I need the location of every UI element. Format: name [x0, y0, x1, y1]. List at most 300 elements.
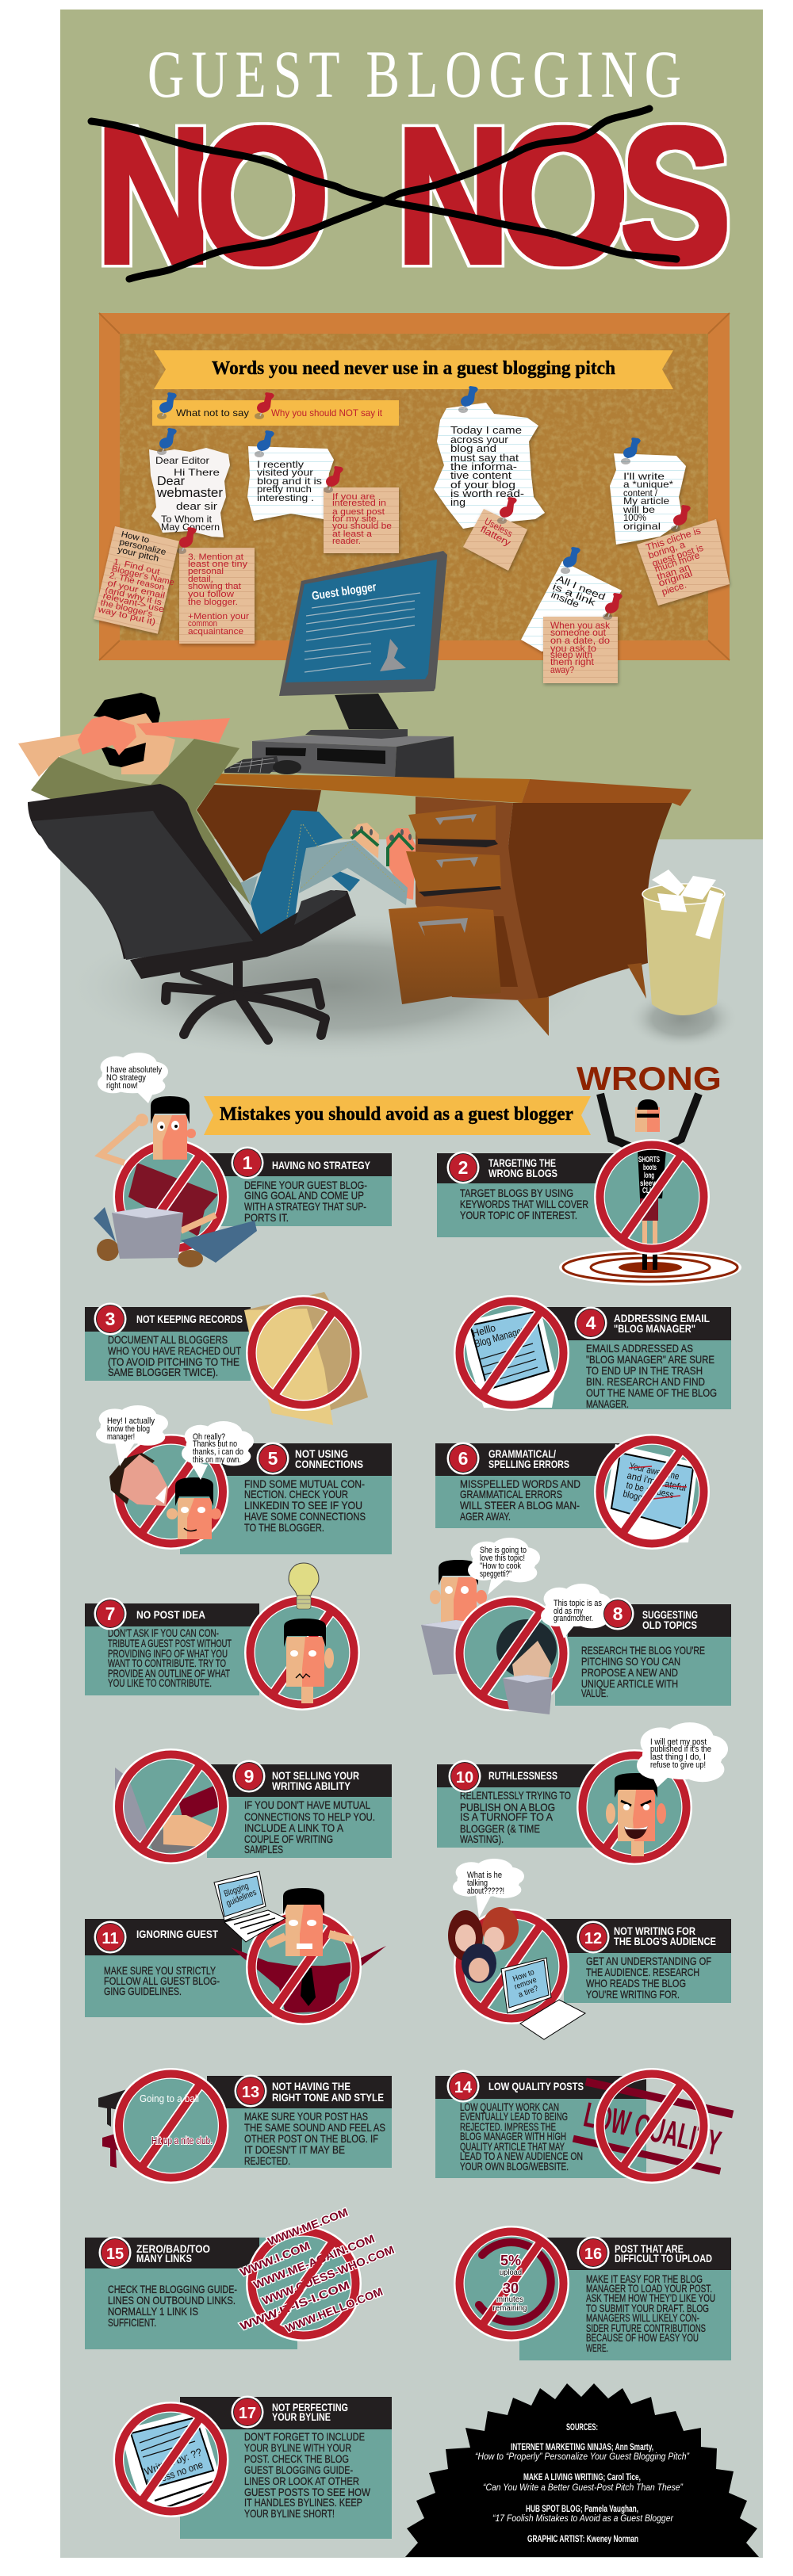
grinning head: [606, 1773, 666, 1856]
note: I recently visited: pretty much: [257, 483, 312, 495]
speech bubble woman: This topic is as: [554, 1599, 602, 1608]
note: mention personal detail: you follow: [188, 590, 234, 599]
note: how to personalize: 2. The reason: [109, 571, 165, 593]
note: salutations: webmaster: [156, 485, 223, 500]
title: OLD TOPICS: [642, 1619, 697, 1631]
description: MANAGER TO LOAD YOUR POST.: [586, 2282, 712, 2295]
cork surface: [120, 334, 708, 640]
description: GING GUIDELINES.: [104, 1985, 182, 1997]
description: GET AN UNDERSTANDING OF: [586, 1955, 711, 1967]
number badge: [257, 1443, 289, 1474]
links: WWW.I.COM: [238, 2239, 312, 2279]
laptop with byline: [121, 2410, 219, 2509]
description: OUT THE NAME OF THE BLOG: [586, 1386, 717, 1399]
title: ZERO/BAD/TOO: [136, 2242, 210, 2255]
description: [460, 1789, 571, 1845]
panel: [207, 1153, 392, 1226]
note: useless flattery: Useless: [483, 515, 515, 539]
arms: [268, 1934, 353, 1944]
description: LINKEDIN TO SEE IF YOU: [244, 1499, 362, 1512]
shirt words: boots: [643, 1164, 657, 1172]
description: WERE.: [586, 2341, 608, 2354]
laptop with errors: and i'm grateful: [626, 1470, 688, 1493]
board frame: [99, 313, 730, 660]
title: RUTHLESSNESS: [488, 1769, 557, 1782]
description: TRIBUTE A GUEST POST WITHOUT: [108, 1637, 232, 1649]
note: if you are interested: at least a: [332, 529, 373, 539]
chair seat: [130, 890, 356, 979]
letters: N: [96, 87, 212, 304]
links: WWW.ME.COM: [266, 2206, 350, 2248]
mistake 12: not writing for the blog's audience: [448, 1859, 731, 2039]
head: [283, 1888, 324, 1956]
speech bubble woman: grandmother.: [554, 1614, 593, 1623]
header bar: [85, 1603, 259, 1626]
second head: [167, 1477, 221, 1539]
note: I recently visited: blog and it is: [257, 476, 322, 487]
header bar: [207, 1153, 392, 1176]
note: mention personal detail: +Mention your: [188, 612, 249, 621]
sources text: “17 Foolish Mistakes to Avoid as a Guest Blogger: [492, 2513, 674, 2524]
mistake 13: not having the right tone and style: [98, 2069, 392, 2183]
note: when you ask someone: When you ask: [550, 620, 611, 631]
chair base: [166, 963, 325, 1040]
description: DON'T FORGET TO INCLUDE: [244, 2430, 365, 2443]
links: WWW.ME-AGAIN.COM: [251, 2232, 377, 2291]
description: [460, 2100, 583, 2173]
note: this cliche is boring: boring, a: [647, 539, 687, 561]
note: I'll write unique content: will be: [623, 504, 655, 515]
progress text: 5%: [500, 2253, 521, 2268]
description: PORTS IT.: [244, 1211, 289, 1224]
mistake 8: suggesting old topics: [421, 1538, 731, 1714]
description: EMAILS ADDRESSED AS: [586, 1342, 693, 1355]
description: LEAD TO A NEW AUDIENCE ON: [460, 2150, 583, 2162]
note: mention personal detail: [177, 527, 255, 644]
description: SAMPLES: [244, 1843, 283, 1856]
sources text: SOURCES:: [566, 2421, 598, 2433]
progress text: minutes: [496, 2295, 523, 2304]
shirt words: [638, 1156, 660, 1195]
hand: [136, 1114, 148, 1126]
title: IGNORING GUEST: [136, 1928, 218, 1940]
legend strip: What not to say: [176, 407, 249, 419]
mistake 4: addressing email blog manager: [454, 1296, 731, 1410]
note: mention personal detail: acquaintance: [188, 627, 243, 636]
description: SIDER FUTURE CONTRIBUTIONS: [586, 2322, 706, 2334]
progress text: upload: [500, 2268, 522, 2277]
note: if you are interested: If you are: [332, 492, 375, 502]
header bar: [214, 1443, 392, 1476]
number badge: [577, 2237, 609, 2268]
laptop with errors: Your awesome: [628, 1460, 680, 1482]
description: [108, 1626, 232, 1689]
note: all I need is a link: inside: [550, 589, 581, 610]
light bulb: [289, 1563, 319, 1609]
laptop: how to remove a tire: a tire?: [517, 1984, 540, 2000]
letters: S: [620, 87, 731, 304]
speech bubble right: thanks, i can do: [193, 1447, 243, 1457]
description: WHO YOU HAVE REACHED OUT: [108, 1344, 241, 1357]
description: POST. CHECK THE BLOG: [244, 2452, 349, 2465]
title: WRONG BLOGS: [488, 1167, 557, 1179]
links: WWW.HELLO.COM: [283, 2285, 385, 2335]
sources text: HUB SPOT BLOG; Pamela Vaughan,: [526, 2503, 638, 2514]
typing hands on laptop: [115, 1768, 222, 1855]
title: NOT WRITING FOR: [614, 1924, 695, 1937]
description: LINES ON OUTBOUND LINKS.: [108, 2294, 236, 2307]
description: YOUR BYLINE SHORT!: [244, 2507, 335, 2520]
laptop: how to remove a tire: How to: [511, 1968, 536, 1984]
speech bubble right: Oh really?: [193, 1432, 225, 1442]
title: [295, 1447, 363, 1470]
note: if you are interested: you should be: [332, 522, 392, 531]
sources text: GRAPHIC ARTIST: Kweney Norman: [527, 2533, 638, 2544]
note: when you ask someone: away?: [550, 664, 574, 675]
hair: [94, 693, 160, 725]
number badge: 2: [458, 1157, 468, 1178]
note: today I came across: ing: [450, 496, 465, 508]
note: this cliche is boring: guest post is: [651, 542, 705, 569]
floor shadow under desk and chair: [63, 912, 603, 1062]
note: how to personalize: 1. Find out: [113, 557, 161, 577]
title: HAVING NO STRATEGY: [272, 1159, 371, 1171]
number badge: 10: [456, 1769, 473, 1787]
title: SUGGESTING: [642, 1608, 698, 1621]
note: when you ask someone: sleep with: [550, 649, 592, 660]
no sign ring: [455, 1297, 568, 1409]
speech bubble: [453, 1859, 524, 1918]
panel: corkboard: [94, 313, 730, 660]
laptop: how to remove a tire: [501, 1958, 585, 2039]
mistake 3: not keeping records: [85, 1292, 368, 1425]
target on floor: [559, 1249, 741, 1286]
letters: N: [396, 87, 510, 304]
description: CHECK THE BLOGGING GUIDE-: [108, 2283, 237, 2295]
description: THE AUDIENCE. RESEARCH: [586, 1966, 699, 1978]
scene: desk: [197, 774, 691, 1036]
speech bubble top: speggetti?": [480, 1569, 511, 1579]
feet: [350, 823, 379, 858]
mistake 11: ignoring guest guidelines: [85, 1871, 386, 2024]
note: I'll write unique content: a *unique*: [623, 479, 673, 490]
description: MANAGER.: [586, 1397, 629, 1410]
note: if you are interested: a guest post: [332, 507, 385, 517]
description: THE SAME SOUND AND FEEL AS: [244, 2121, 385, 2134]
panel: [519, 2238, 731, 2360]
face: [114, 713, 175, 774]
note: I'll write unique content: [610, 438, 686, 545]
keyboard and mouse: [224, 756, 301, 774]
description: [244, 1179, 367, 1224]
speech bubble: last thing I do, I: [650, 1752, 706, 1762]
description: DEFINE YOUR GUEST BLOG-: [244, 1179, 367, 1191]
mistake 16: posts difficult to upload: [454, 2226, 731, 2360]
number badge: 6: [458, 1448, 468, 1469]
speech bubble left: know the blog: [107, 1424, 150, 1434]
panel: [85, 2238, 297, 2349]
title: POST THAT ARE: [615, 2242, 684, 2255]
note: today I came across: tive content: [450, 469, 511, 481]
description: INCLUDE A LINK TO A: [244, 1821, 344, 1834]
description: PUBLISH ON A BLOG: [460, 1801, 555, 1814]
description: GRAMMATICAL ERRORS: [460, 1488, 562, 1500]
note: mention personal detail: detail,: [188, 575, 213, 584]
man with laptop: [421, 1560, 492, 1675]
note: today I came across: must say that: [450, 452, 519, 464]
note: how to personalize: (and why it is: [104, 585, 163, 608]
description: QUALITY ARTICLE THAT MAY: [460, 2140, 565, 2153]
title: NOT SELLING YOUR: [272, 1769, 359, 1782]
note: all I need is a link: is a link: [551, 581, 598, 609]
laptop with byline: I guess no one: [145, 2459, 205, 2489]
laptop: guidelines: Blogging: [223, 1882, 250, 1899]
laptop: Blog Manager: [473, 1324, 526, 1350]
sources burst: [405, 2383, 759, 2557]
speech bubble top: [468, 1538, 540, 1595]
description: (TO AVOID PITCHING TO THE: [108, 1355, 239, 1368]
number badge: 3: [105, 1309, 115, 1329]
title: TARGETING THE: [488, 1156, 556, 1169]
letters: [96, 87, 731, 304]
folders: [244, 1292, 368, 1425]
letters: O: [197, 87, 330, 304]
description: FOLLOW ALL GUEST BLOG-: [104, 1974, 220, 1987]
banner: words heading: Words you need never use in a guest blogging pitch: [212, 358, 615, 379]
links: WWW.GUESS-WHO.COM: [260, 2243, 396, 2307]
title: NOT KEEPING RECORDS: [136, 1313, 243, 1325]
description: KEYWORDS THAT WILL COVER: [460, 1198, 588, 1210]
description: YOU'RE WRITING FOR.: [586, 1988, 680, 2001]
description: IS A TURNOFF TO A: [460, 1810, 554, 1823]
number badge: 14: [454, 2079, 473, 2096]
man holding sign: [600, 1094, 699, 1270]
note: when you ask someone: someone out: [550, 627, 607, 638]
note: how to personalize: the blogger's: [100, 598, 154, 619]
three women: [448, 1907, 519, 1983]
title: WRITING ABILITY: [272, 1779, 351, 1792]
description: [586, 2272, 715, 2354]
note: I'll write unique content: I'll write: [623, 471, 665, 482]
note: salutations: dear sir: [176, 500, 218, 512]
progress ring: [479, 2242, 551, 2322]
note: today I came across: blog and: [450, 442, 496, 454]
description: [586, 1342, 717, 1410]
speech bubble woman: old as my: [554, 1607, 583, 1616]
frowning head: [284, 1619, 334, 1703]
banner: words heading: [154, 350, 673, 389]
WRONG sign: WRONG: [577, 1060, 722, 1097]
description: [460, 1477, 580, 1523]
mistake 9: not selling your writing ability: [114, 1749, 392, 1863]
desk legs: [518, 997, 549, 1036]
legend strip: Why you should NOT say it: [271, 407, 383, 419]
no sign ring: [595, 1435, 709, 1549]
description: GUEST POSTS TO SEE HOW: [244, 2486, 371, 2498]
note: all I need is a link: [521, 547, 622, 652]
note: how to personalize: way to put it): [96, 605, 156, 627]
header bar: [568, 1604, 731, 1637]
header bar: [435, 2076, 646, 2099]
left arm: [18, 731, 105, 777]
sources text: “Can You Write a Better Guest-Post Pitch Than These”: [483, 2482, 684, 2493]
description: DON'T ASK IF YOU CAN CON-: [108, 1626, 219, 1639]
speech bubble right: Thanks but no: [193, 1439, 237, 1449]
office chair: [28, 784, 356, 1040]
number badge: 17: [239, 2405, 256, 2422]
letters: O: [498, 87, 629, 304]
description: [108, 2283, 237, 2329]
title: [614, 1312, 710, 1335]
description: [244, 2430, 371, 2520]
low quality stamp: [573, 2077, 734, 2175]
shirt words: CLU: [642, 1187, 653, 1195]
number badge: [233, 1760, 265, 1793]
right leg: [299, 840, 408, 905]
description: MAKE SURE YOUR POST HAS: [244, 2110, 368, 2123]
title: LOW QUALITY POSTS: [488, 2080, 584, 2093]
description: YOU LIKE TO CONTRIBUTE.: [108, 1676, 212, 1689]
note: salutations: Hi There: [174, 467, 220, 478]
title: YOUR BYLINE: [272, 2410, 331, 2423]
description: [586, 1955, 711, 2001]
header bar: [207, 2076, 392, 2108]
black cross strokes: [91, 109, 676, 279]
panel: [435, 2076, 646, 2178]
panel: [555, 1604, 731, 1706]
number badge: [94, 1598, 127, 1630]
sources text: [475, 2421, 690, 2544]
description: [108, 1333, 241, 1378]
number badge: [98, 2237, 132, 2268]
description: UNIQUE ARTICLE WITH: [581, 1677, 678, 1690]
title: [615, 2242, 712, 2265]
head: [151, 1096, 196, 1160]
title: [272, 2401, 348, 2423]
header bar: [85, 1307, 251, 1332]
note: how to personalize: your pitch: [117, 545, 159, 564]
mistake 1: having no strategy: [94, 1053, 392, 1267]
title: THE BLOG'S AUDIENCE: [614, 1935, 716, 1947]
description: FIND SOME MUTUAL CON-: [244, 1477, 365, 1490]
title: ADDRESSING EMAIL: [614, 1312, 710, 1324]
description: [104, 1964, 220, 1997]
note: useless flattery: flattery: [479, 523, 512, 548]
panel: [207, 2076, 392, 2168]
laptop with byline: Written by: ??: [143, 2446, 203, 2478]
note: this cliche is boring: piece.: [661, 579, 688, 598]
number badge: 12: [584, 1930, 602, 1947]
title: [488, 1156, 557, 1179]
title: SPELLING ERRORS: [488, 1458, 569, 1470]
description: WITH A STRATEGY THAT SUP-: [244, 1200, 366, 1213]
banner: mistakes heading: [204, 1096, 591, 1135]
note: when you ask someone: on a date, do: [550, 635, 610, 646]
description: MAKE IT EASY FOR THE BLOG: [586, 2272, 703, 2285]
header bar: [207, 1764, 392, 1797]
note: salutations: May Concern: [161, 522, 220, 533]
note: this cliche is boring: original: [657, 568, 694, 589]
header bar: [85, 1919, 242, 1955]
description: DOCUMENT ALL BLOGGERS: [108, 1333, 228, 1346]
mistake 14: low quality posts: [435, 2069, 734, 2183]
panel: [85, 1603, 259, 1695]
title: "BLOG MANAGER": [614, 1322, 695, 1335]
description: LOW QUALITY WORK CAN: [460, 2100, 559, 2113]
panel: [85, 1919, 272, 2017]
laptop: Helllo: [471, 1321, 497, 1340]
note: I'll write unique content: original: [623, 521, 661, 532]
title: GUEST BLOGGING: [147, 37, 681, 112]
floor shadow under bin: [627, 988, 738, 1049]
panel: [437, 1153, 634, 1237]
note: salutations: [149, 428, 230, 537]
description: LINES OR LOOK AT OTHER: [244, 2475, 359, 2487]
description: WHO READS THE BLOG: [586, 1977, 686, 1989]
description: WASTING).: [460, 1833, 504, 1845]
shirt words: long: [644, 1171, 654, 1180]
title: [614, 1924, 716, 1947]
number badge: [94, 1921, 127, 1953]
woman: [496, 1619, 557, 1687]
speech bubble woman: [541, 1584, 611, 1638]
speech bubble left: manager!: [107, 1432, 135, 1442]
note: how to personalize: of your email: [106, 579, 166, 601]
desk left panel: [197, 785, 321, 881]
shirt: [31, 739, 251, 905]
no sign: [114, 1140, 228, 1254]
note: salutations: Dear Editor: [155, 455, 209, 466]
description: [244, 1798, 375, 1856]
scene: person with feet on desk: [18, 693, 416, 934]
speech bubble right: this on my own.: [193, 1455, 241, 1465]
note: mention personal detail: common: [188, 619, 217, 629]
speech bubble: I will get my post: [650, 1737, 707, 1747]
header bar: [85, 2238, 259, 2268]
description: REJECTED. IMPRESS THE: [460, 2120, 556, 2133]
crossed out heading: NO NOS: [91, 87, 731, 304]
description: MAKE SURE YOU STRICTLY: [104, 1964, 216, 1977]
number badge: [447, 1151, 479, 1184]
note: this cliche is boring: much more: [653, 549, 701, 575]
number badge: 15: [106, 2245, 124, 2263]
speech bubble: right now!: [106, 1081, 138, 1091]
number badge: 7: [105, 1603, 115, 1624]
description: WANT TO CONTRIBUTE. TRY TO: [108, 1657, 226, 1669]
note: how to personalize: Blogger's Name: [111, 564, 175, 588]
header bar: [546, 2238, 731, 2270]
note: how to personalize: [94, 526, 184, 635]
note: how to personalize: How to: [121, 529, 150, 545]
note: I recently visited: I recently: [257, 459, 304, 470]
note: I recently visited: visited your: [257, 467, 313, 478]
note: when you ask someone: you ask to: [550, 643, 596, 654]
description: GING GOAL AND COME UP: [244, 1189, 364, 1202]
title: [488, 1447, 569, 1470]
no sign ring: [595, 2069, 709, 2183]
black signpost: [98, 2089, 137, 2127]
speech bubble: refuse to give up!: [650, 1760, 706, 1770]
panel: [520, 1307, 731, 1409]
speech bubble: NO strategy: [106, 1073, 146, 1083]
progress text: remaining: [493, 2304, 527, 2313]
speech bubble left: [96, 1405, 168, 1466]
title: [272, 1769, 359, 1792]
note: today I came across: across your: [450, 434, 509, 445]
computer base unit: [252, 736, 454, 778]
beard: [100, 743, 146, 767]
description: YOUR BYLINE WITH YOUR: [244, 2441, 351, 2454]
